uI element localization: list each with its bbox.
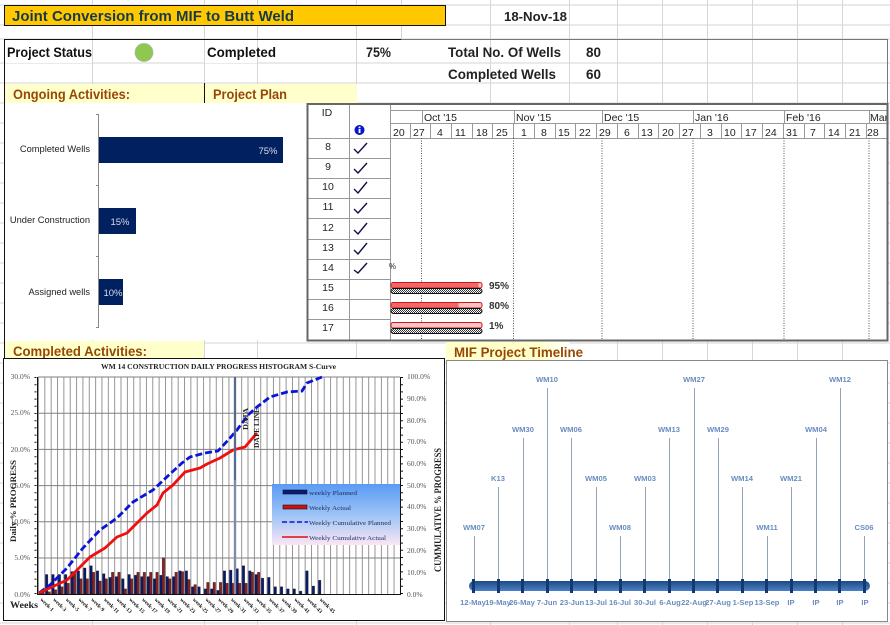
gantt week headers: 6	[624, 127, 630, 139]
heading: ongoing activities	[5, 84, 204, 103]
total wells value: 80	[586, 45, 601, 60]
left axis labels: 5.0%	[14, 553, 30, 562]
well labels: WM12	[829, 375, 851, 384]
left axis labels: 0.0%	[14, 590, 30, 599]
status value: Completed	[207, 45, 276, 60]
gantt id column: 9	[325, 161, 331, 173]
left axis labels: 20.0%	[11, 445, 30, 454]
weekly cumulative planned curve	[39, 377, 322, 593]
gantt week headers: 31	[786, 127, 798, 139]
milestone date labels: 19-May	[485, 598, 512, 607]
gantt month headers: Oct '15	[424, 112, 457, 124]
milestone date labels: 26-May	[509, 598, 536, 607]
bar: under construction	[10, 208, 136, 234]
chart legend: Weekly Cumulative Actual	[309, 535, 386, 542]
week axis tick labels: week-39	[280, 597, 298, 615]
title banner: Joint Conversion from MIF to Butt Weld	[12, 8, 294, 25]
well labels: WM11	[756, 523, 779, 532]
bar: completed wells	[20, 137, 283, 163]
week axis tick labels: week-41	[293, 597, 311, 615]
bar: under construction: 15%	[110, 217, 130, 228]
week axis tick labels: week-13	[115, 597, 133, 615]
bar: completed wells: 75%	[258, 146, 278, 157]
gantt id column: 11	[323, 201, 334, 213]
well labels: WM04	[805, 425, 828, 434]
right axis labels: 20.0%	[407, 546, 426, 555]
title banner	[4, 6, 446, 26]
chart title: WM 14 CONSTRUCTION DAILY PROGRESS HISTOGRAM S-Curve	[101, 362, 337, 371]
bar: completed wells: Completed Wells	[20, 144, 90, 154]
heading: completed activities: Completed Activities:	[13, 344, 147, 359]
week axis tick labels: week-33	[242, 597, 260, 615]
week axis tick labels: week-11	[102, 597, 120, 615]
timeline tick marks	[474, 579, 864, 593]
gantt week headers: 13	[641, 127, 653, 139]
bar: assigned wells	[28, 279, 123, 305]
right axis labels: 50.0%	[407, 481, 426, 490]
week axis tick labels: week-1	[39, 597, 55, 613]
panel: well status bar chart	[4, 103, 307, 358]
week axis tick labels: week-43	[305, 597, 323, 615]
well labels: WM13	[658, 425, 680, 434]
icon: info indicator	[354, 125, 364, 135]
gantt week headers: 27	[413, 127, 425, 139]
y axis title right: CUMMULATIVE % PROGRESS	[433, 448, 443, 572]
well labels: WM03	[634, 474, 656, 483]
week axis tick labels: week-17	[140, 597, 158, 615]
gantt week headers: 21	[849, 127, 861, 139]
right axis labels: 90.0%	[407, 394, 426, 403]
gantt month headers: Nov '15	[516, 112, 551, 124]
timeline axis bar	[469, 581, 870, 591]
milestone date labels: 7-Jun	[537, 598, 557, 607]
milestone date labels: 12-May	[460, 598, 487, 607]
completed wells value: 60	[586, 67, 601, 82]
gantt task 15 bar	[391, 281, 509, 294]
week axis tick labels: week-19	[153, 597, 171, 615]
week axis tick labels: week-45	[318, 597, 336, 615]
gantt week headers: 1	[521, 127, 527, 139]
left axis labels	[11, 372, 30, 599]
well labels: WM14	[731, 474, 754, 483]
panel: s-curve chart	[4, 358, 444, 620]
left axis labels: 10.0%	[11, 517, 30, 526]
left axis labels: 25.0%	[11, 408, 30, 417]
right axis labels: 70.0%	[407, 437, 426, 446]
milestone date labels: 30-Jul	[634, 598, 656, 607]
right axis labels: 30.0%	[407, 524, 426, 533]
well labels: WM27	[683, 375, 705, 384]
gantt id column: 13	[322, 242, 334, 254]
week axis tick labels: week-27	[204, 597, 222, 615]
milestone date labels: 27-Aug	[705, 598, 731, 607]
gantt task 16 bar	[391, 301, 509, 314]
completed wells label: Completed Wells	[448, 67, 556, 82]
well labels: WM05	[585, 474, 608, 483]
left axis labels: 30.0%	[11, 372, 30, 381]
well labels: WM30	[512, 425, 534, 434]
timeline stems	[474, 388, 864, 581]
weeks axis label: Weeks	[10, 600, 39, 610]
weekly planned bars	[39, 566, 321, 594]
gantt id column: 8	[325, 141, 331, 153]
data date line: DATA	[241, 407, 250, 430]
chart gridlines	[38, 377, 400, 594]
well labels: WM29	[707, 425, 729, 434]
data date line: DATE LINE	[252, 408, 261, 448]
gantt task 17 bar: 1%	[489, 321, 504, 332]
milestone date labels: IP	[787, 598, 795, 607]
week axis tick labels	[39, 597, 336, 615]
gantt week headers: 10	[724, 127, 736, 139]
gantt week headers: 20	[662, 127, 674, 139]
chart legend: Weekly Actual	[309, 505, 351, 512]
gantt month headers: Mar	[870, 112, 889, 124]
week axis tick labels: week-7	[77, 597, 93, 613]
milestone date labels: 22-Aug	[681, 598, 707, 607]
milestone date labels: 6-Aug	[659, 598, 681, 607]
heading: mif project timeline: MIF Project Timeline	[454, 345, 583, 360]
gantt month headers: Jan '16	[695, 112, 729, 124]
panel: project timeline	[446, 360, 888, 622]
gantt week headers: 20	[393, 127, 405, 139]
gantt week headers: 8	[541, 127, 547, 139]
right axis labels: 0.0%	[407, 590, 423, 599]
gantt column and row rules	[307, 104, 390, 340]
gantt task 16 bar: 80%	[489, 301, 509, 312]
gantt id column: 10	[322, 181, 334, 193]
right axis labels: 80.0%	[407, 416, 426, 425]
right axis labels: 100.0%	[407, 372, 430, 381]
gantt week headers: 17	[745, 127, 757, 139]
heading: project plan	[204, 83, 357, 103]
week axis tick labels: week-29	[216, 597, 234, 615]
icon: green status dot	[135, 44, 153, 62]
heading: ongoing activities: Ongoing Activities:	[13, 87, 130, 102]
milestone date labels: IP	[861, 598, 869, 607]
gantt week headers: 3	[707, 127, 713, 139]
bar: assigned wells: Assigned wells	[28, 287, 90, 297]
week axis tick labels: week-9	[89, 597, 105, 613]
gantt week headers: 11	[455, 127, 466, 139]
weekly cumulative actual curve	[39, 433, 257, 593]
week axis tick labels: week-23	[178, 597, 196, 615]
week axis tick labels: week-35	[254, 597, 273, 615]
chart legend	[272, 484, 400, 545]
week axis tick labels: week-21	[166, 597, 184, 615]
gantt month headers: Dec '15	[604, 112, 639, 124]
right axis labels: 40.0%	[407, 502, 426, 511]
bar: under construction: Under Construction	[10, 215, 90, 225]
week axis tick labels: week-15	[127, 597, 146, 615]
gantt week headers: 18	[476, 127, 488, 139]
gantt id column: ID	[322, 107, 333, 119]
gantt week headers: 15	[558, 127, 570, 139]
milestone date labels: IP	[812, 598, 820, 607]
well labels	[463, 375, 874, 532]
stray percent glyph: %	[389, 262, 396, 271]
gantt month headers	[424, 112, 889, 124]
gantt id column: 15	[322, 282, 334, 294]
well labels: WM21	[780, 474, 803, 483]
milestone date labels: 13-Sep	[755, 598, 780, 607]
well labels: CS06	[854, 523, 874, 532]
milestone date labels: IP	[836, 598, 844, 607]
milestone date labels	[460, 598, 869, 607]
left axis labels: 15.0%	[11, 481, 30, 490]
well labels: WM06	[560, 425, 582, 434]
status label: Project Status	[7, 45, 92, 60]
heading: completed activities	[5, 341, 204, 359]
axis lines	[38, 377, 400, 594]
gantt week headers: 28	[867, 127, 879, 139]
gantt id column: 12	[322, 222, 334, 234]
gantt week headers: 22	[579, 127, 591, 139]
well labels: K13	[491, 474, 505, 483]
right axis labels: 10.0%	[407, 568, 426, 577]
gantt id column: 16	[322, 302, 334, 314]
week axis tick labels: week-3	[51, 597, 67, 613]
gantt id column: 14	[322, 262, 334, 274]
gantt task 15 bar: 95%	[489, 281, 509, 292]
gantt task 17 bar	[391, 321, 504, 334]
well labels: WM07	[463, 523, 485, 532]
week axis tick labels: week-37	[267, 597, 285, 615]
week axis tick labels: week-31	[229, 597, 247, 615]
milestone date labels: 1-Sep	[733, 598, 754, 607]
y axis title left: Daily % PROGRESS	[8, 460, 18, 542]
chart legend: Weekly Cumulative Planned	[309, 520, 392, 527]
gantt week headers: 4	[437, 127, 443, 139]
well labels: WM10	[536, 375, 558, 384]
gantt week headers: 25	[496, 127, 508, 139]
panel: gantt chart	[307, 104, 889, 341]
gantt week headers: 27	[682, 127, 694, 139]
right axis labels	[407, 372, 430, 599]
bar: assigned wells: 10%	[103, 288, 123, 299]
right axis labels: 60.0%	[407, 459, 426, 468]
report date: 18-Nov-18	[504, 10, 567, 24]
milestone date labels: 13-Jul	[585, 598, 607, 607]
gantt id column	[322, 107, 334, 334]
gantt week headers: 24	[765, 127, 777, 139]
gantt month headers: Feb '16	[786, 112, 821, 124]
gantt id column: 17	[322, 322, 334, 334]
week axis tick labels: week-5	[64, 597, 80, 613]
completion percent: 75%	[366, 45, 391, 60]
data date line	[235, 377, 261, 594]
panel: project status	[4, 40, 888, 104]
well labels: WM08	[609, 523, 631, 532]
icon: completed check marks	[354, 143, 367, 273]
weekly actual bars	[42, 558, 260, 594]
gantt week headers: 29	[599, 127, 611, 139]
gantt week headers: 14	[828, 127, 840, 139]
heading: project plan: Project Plan	[213, 87, 287, 102]
milestone date labels: 23-Jun	[560, 598, 585, 607]
total wells label: Total No. Of Wells	[448, 45, 561, 60]
gantt week headers	[393, 127, 879, 139]
gantt week headers: 7	[810, 127, 816, 139]
week axis tick labels: week-25	[191, 597, 209, 615]
milestone date labels: 16-Jul	[609, 598, 631, 607]
chart legend: weekly Planned	[309, 490, 358, 497]
